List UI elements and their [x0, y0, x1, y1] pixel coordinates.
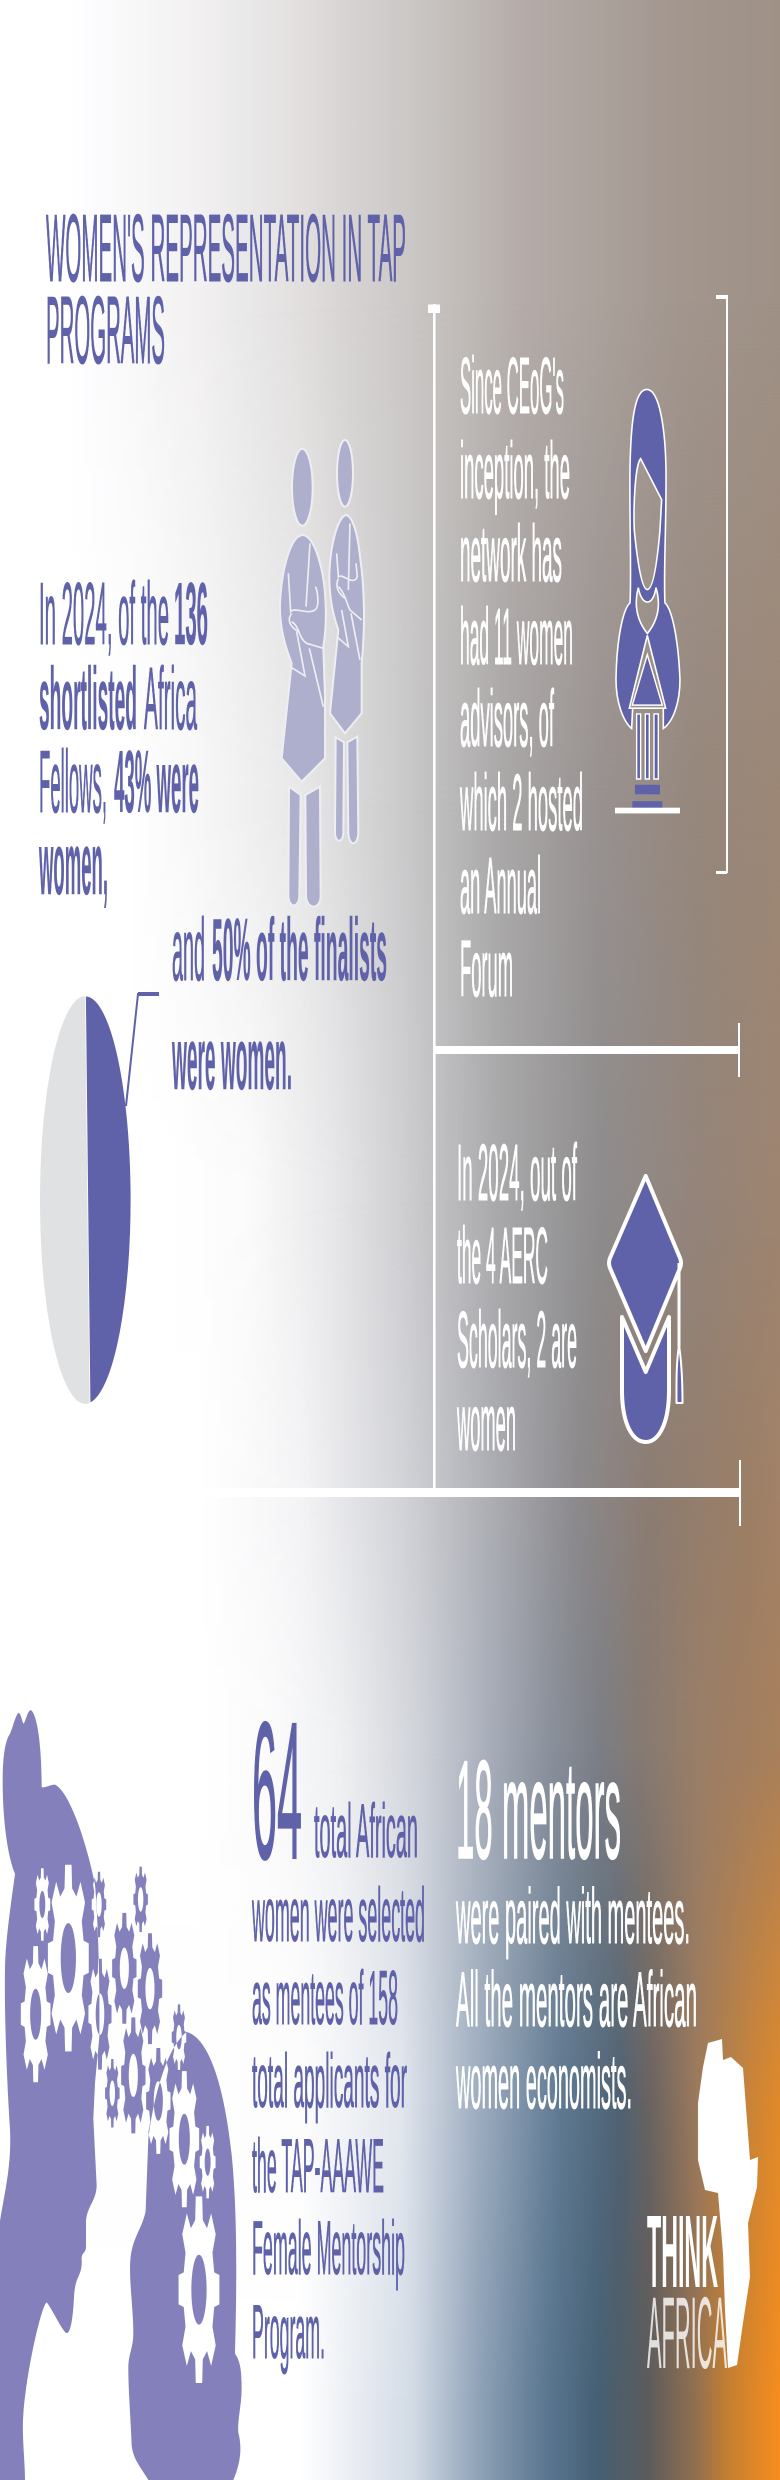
- text: finalists: and: [172, 900, 205, 999]
- panel lines: advisors and scholars frame: [200, 295, 741, 1526]
- text: Africa: [144, 649, 197, 748]
- text: shortlisted Africa Fellows: [39, 564, 208, 913]
- icon: two women figures: [280, 440, 364, 907]
- title: PROGRAMS: [46, 277, 165, 384]
- text: women advisors: [460, 341, 583, 1013]
- pie chart: [40, 992, 159, 1404]
- icon: woman advisor with pillar: [615, 389, 680, 813]
- text: In 2024, of the: [39, 564, 169, 663]
- text: total African: [314, 1789, 418, 1874]
- stat: 64 mentees: Program.: [252, 2290, 325, 2375]
- text: finalists: [172, 900, 387, 1108]
- text: shortlisted Africa Fellows: Fellows,: [39, 732, 107, 831]
- stat: 64 mentees: 64: [252, 1682, 302, 1900]
- text: shortlisted: [39, 649, 137, 748]
- text: 136: [174, 564, 208, 663]
- callout line: [126, 994, 159, 1106]
- text: AERC scholars: [457, 1128, 577, 1467]
- icon: two heads with gears: [0, 1710, 242, 2480]
- icon: graduation cap: [609, 1176, 682, 1442]
- stat: 18 mentors: [456, 1731, 697, 2125]
- text: shortlisted Africa Fellows: women,: [39, 814, 108, 913]
- text: were women.: [172, 1009, 292, 1108]
- text: 43% were: [114, 732, 199, 831]
- text: women: [457, 1378, 516, 1467]
- stat: 64 mentees: [252, 1682, 425, 2375]
- logo: Think Africa: [647, 2039, 758, 2390]
- text: women advisors: Forum: [460, 924, 513, 1013]
- title: [46, 195, 406, 384]
